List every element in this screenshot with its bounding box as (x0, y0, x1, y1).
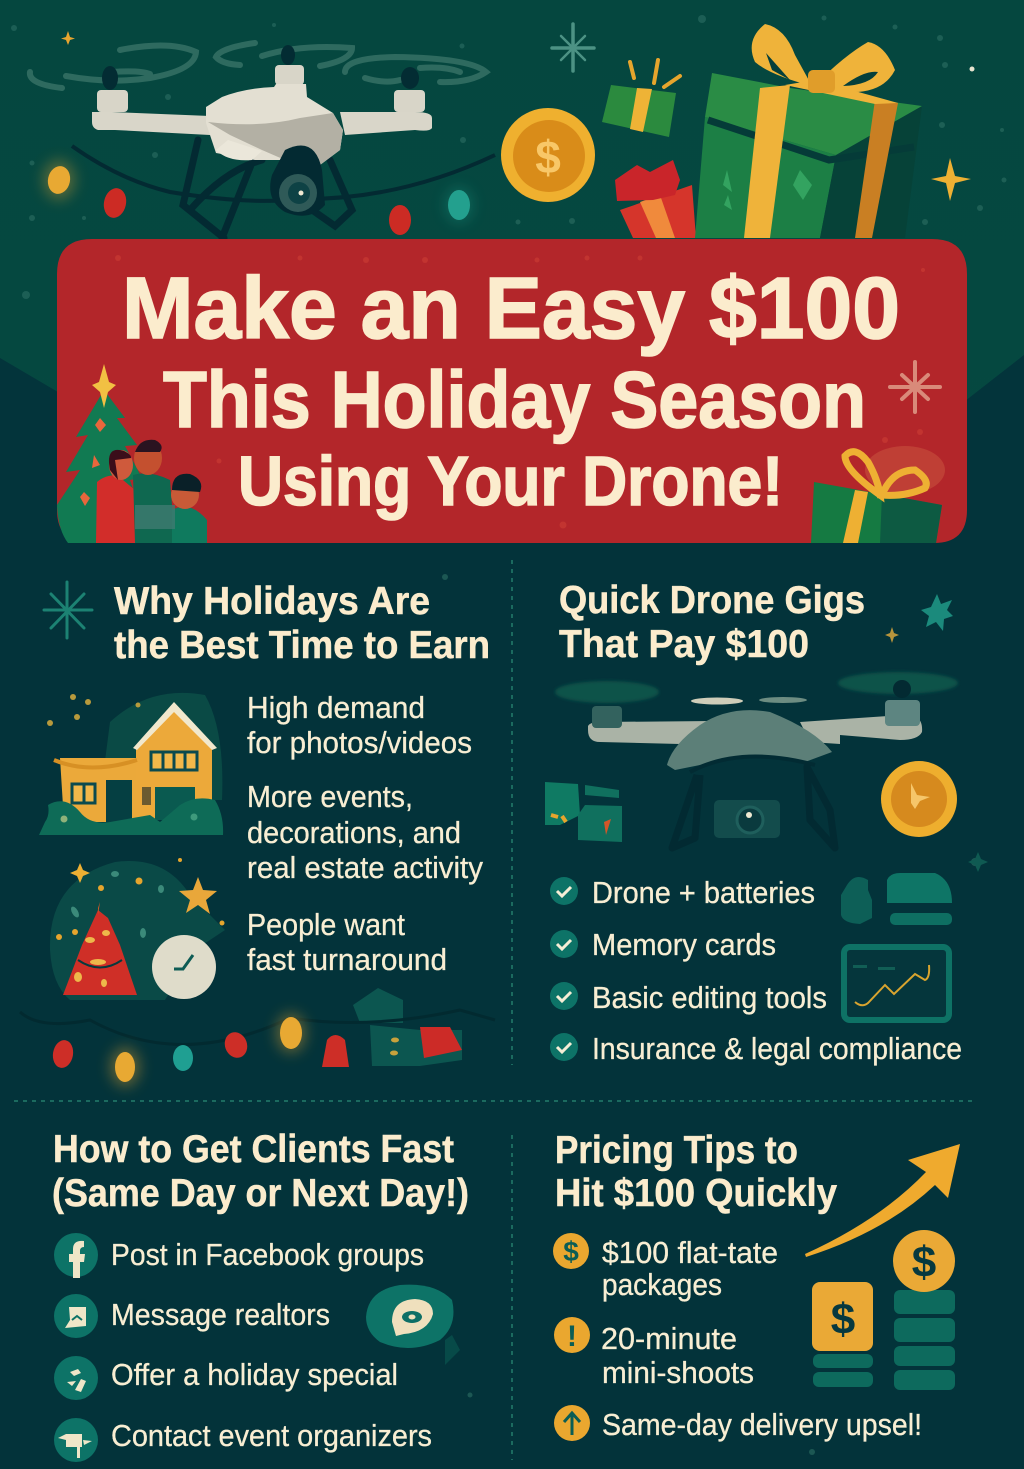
item: holiday special (54, 1356, 398, 1400)
heading: pricing tips: Hit $100 Quickly (555, 1172, 837, 1215)
illustration: growth chart screen (844, 947, 949, 1020)
item: message realtors: Message realtors (111, 1297, 330, 1332)
item: event organizers: Contact event organizers (111, 1418, 432, 1453)
illustration: coin stacks: $ (912, 1238, 936, 1287)
illustration: green gear bags (545, 782, 622, 842)
item: holiday special: Offer a holiday special (111, 1357, 398, 1392)
illustration: gold dollar coin (501, 108, 595, 202)
heading: get clients: (Same Day or Next Day!) (52, 1172, 469, 1215)
panel: quick drone gigs (545, 579, 988, 1066)
icon: snowflake top (552, 24, 594, 71)
camera (270, 146, 325, 216)
text: high demand: High demand (247, 690, 425, 725)
title line 1: Make an Easy $100 (122, 260, 900, 357)
item: mini shoots (554, 1317, 754, 1390)
icon: gold four-point star right (931, 158, 971, 201)
item: flat rate (553, 1233, 778, 1302)
item: same day delivery: Same-day delivery upsel! (602, 1407, 922, 1442)
item: mini shoots: mini-shoots (602, 1355, 754, 1390)
illustration: string lights and gifts (20, 988, 495, 1087)
illustration: holiday gift tree and clock (50, 858, 225, 1000)
heading: quick drone gigs: That Pay $100 (559, 623, 809, 666)
light string wire (72, 146, 495, 201)
icon: teal sparkle (968, 852, 988, 872)
arrow: rising growth (805, 1144, 960, 1257)
banner: red title panel (57, 239, 967, 543)
bulbs (43, 160, 473, 235)
illustration: coin stacks (812, 1230, 955, 1390)
icon: banner snowflake (890, 362, 940, 412)
illustration: small red gift (615, 160, 696, 238)
dashed dividers (14, 560, 975, 1460)
drone body (206, 84, 343, 165)
illustration: decorated house (39, 693, 223, 835)
item: memory cards: Memory cards (592, 927, 776, 962)
item: editing tools: Basic editing tools (592, 980, 827, 1015)
text: more events: real estate activity (247, 850, 483, 885)
icon: teal burst star (921, 594, 953, 631)
illustration: family group (96, 440, 207, 543)
heading: quick drone gigs: Quick Drone Gigs (559, 579, 865, 622)
item: message realtors (54, 1294, 330, 1338)
heading: why holidays: the Best Time to Earn (114, 624, 490, 667)
motors (97, 65, 425, 112)
illustration: banner gift (811, 446, 945, 543)
illustration: gold dollar coin: $ (535, 131, 561, 183)
illustration: dim drone (555, 672, 958, 848)
propeller swirls (30, 43, 486, 88)
text: more events: More events, (247, 779, 413, 814)
item: event organizers (54, 1418, 432, 1462)
item: flat rate: $100 flat-tate (602, 1235, 778, 1270)
text: fast turnaround: People want (247, 907, 405, 942)
icon: small gold sparkle (885, 627, 899, 643)
icon: snowflake (44, 582, 92, 638)
panel: why holidays (20, 580, 495, 1087)
item: drone batteries: Drone + batteries (592, 875, 815, 910)
heading: why holidays: Why Holidays Are (114, 580, 430, 623)
text: fast turnaround: fast turnaround (247, 942, 447, 977)
illustration: batteries (841, 873, 952, 925)
illustration: coin stacks: $ (831, 1295, 855, 1344)
item: mini shoots: ! (567, 1320, 577, 1353)
illustration: flying drone with holiday lights (30, 43, 495, 238)
item: facebook groups: Post in Facebook groups (111, 1237, 424, 1272)
item: insurance: Insurance & legal compliance (592, 1031, 962, 1066)
panel: pricing tips (553, 1129, 960, 1442)
illustration: Christmas tree (57, 364, 150, 543)
arms (92, 112, 432, 135)
icon: small gold star top left (61, 31, 75, 45)
icon: chat bubble badge (366, 1285, 454, 1348)
item: mini shoots: 20-minute (601, 1321, 737, 1356)
title line 3: Using Your Drone! (238, 442, 783, 520)
illustration: small flying gift (602, 60, 680, 137)
text: high demand: for photos/videos (247, 725, 472, 760)
checklist items (550, 875, 962, 1066)
item: flat rate: packages (602, 1267, 722, 1302)
icon: gold coin (881, 761, 957, 837)
text: more events: decorations, and (247, 815, 461, 850)
heading: pricing tips: Pricing Tips to (555, 1129, 798, 1172)
item: facebook groups (54, 1233, 424, 1278)
heading: get clients: How to Get Clients Fast (53, 1128, 454, 1171)
illustration: large green gift with gold ribbon (695, 24, 922, 238)
panel: get clients (52, 1128, 469, 1462)
item: flat rate: $ (563, 1236, 579, 1267)
landing gear (183, 140, 352, 238)
title line 2: This Holiday Season (163, 355, 866, 444)
